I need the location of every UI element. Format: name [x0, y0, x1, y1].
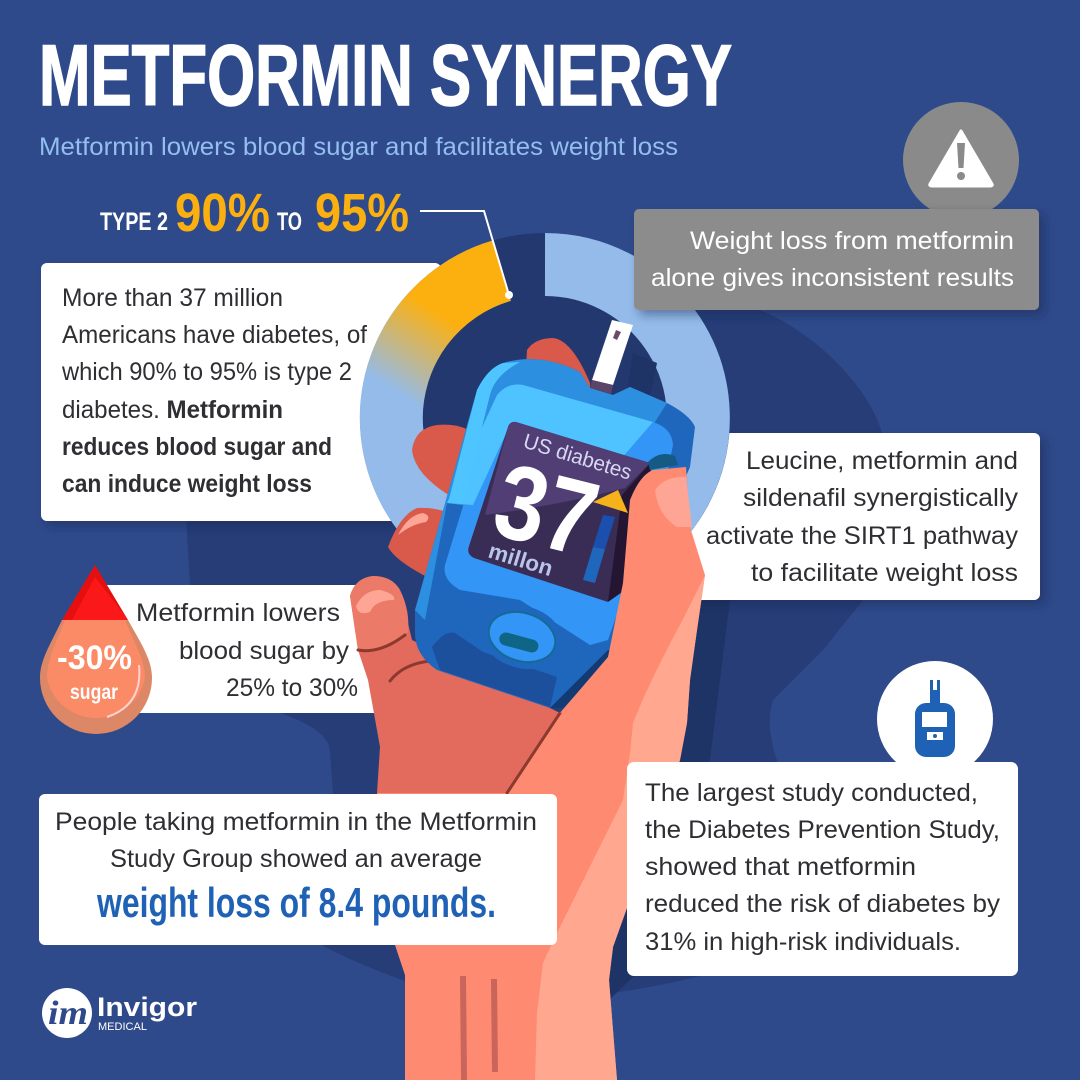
text: diabetes statistics: which 90% to 95% is type 2: [61, 358, 352, 386]
text: blood sugar: 25% to 30%: [226, 674, 358, 702]
meter light edge: [448, 362, 520, 503]
background blob: [185, 290, 882, 1000]
text: blood sugar: [136, 599, 358, 702]
callout: warning: alone gives inconsistent results: [651, 264, 1014, 292]
text: SIRT1 pathway: sildenafil synergistically: [743, 484, 1019, 512]
hand: wrist and lower arm: [377, 575, 705, 1080]
meter side accent: [648, 454, 678, 470]
title: METFORMIN SYNERGY: [39, 28, 732, 124]
panel: blood sugar: [100, 585, 375, 713]
text: blood sugar: blood sugar by: [179, 637, 350, 665]
icon: glucose meter badge: [877, 661, 993, 777]
callout: diabetes prevention study: [627, 762, 1018, 976]
heading: type 2 share: 90%: [175, 183, 270, 243]
callout: weight loss result: Study Group showed an average: [110, 845, 482, 873]
hand: thumb over meter: [560, 467, 705, 713]
screen label: US diabetes: [521, 430, 634, 485]
text: diabetes statistics: reduces blood sugar and: [62, 433, 332, 461]
text: diabetes statistics: [61, 284, 367, 498]
drop label: sugar: [70, 681, 118, 704]
callout: diabetes prevention study: The largest study conducted,: [645, 779, 978, 807]
screen unit: millon: [486, 538, 556, 581]
glucose meter: [415, 320, 695, 708]
hand: creases: [358, 635, 560, 793]
logo: [42, 988, 198, 1038]
text: SIRT1 pathway: Leucine, metformin and: [746, 447, 1018, 475]
hand: palm and thumb: [350, 576, 560, 793]
text: diabetes statistics: Americans have diabetes, of: [62, 321, 367, 349]
callout: diabetes prevention study: the Diabetes Prevention Study,: [645, 816, 1000, 844]
heading: type 2 share: 95%: [315, 183, 409, 243]
callout: weight loss result: [39, 794, 557, 945]
meter screen: [468, 422, 653, 602]
heading: type 2 share: TYPE 2: [100, 208, 168, 236]
drop value: -30%: [57, 639, 132, 677]
meter face: [445, 384, 673, 645]
icon: blood drop: [40, 565, 152, 734]
callout: weight loss result: weight loss of 8.4 pounds.: [96, 879, 496, 926]
logo: Invigor: [97, 992, 198, 1022]
callout: warning: Weight loss from metformin: [690, 227, 1014, 255]
meter highlight: [447, 384, 653, 505]
callout: diabetes prevention study: showed that metformin: [645, 853, 916, 881]
text: diabetes statistics: More than 37 million: [62, 284, 283, 312]
logo: MEDICAL: [98, 1021, 147, 1033]
donut chart: type 2 share: [360, 233, 730, 603]
callout: diabetes prevention study: reduced the risk of diabetes by: [645, 890, 1001, 918]
meter bottom shade: [432, 633, 557, 707]
test strip: [590, 320, 657, 397]
screen arrow: [593, 490, 628, 513]
screen value: 37: [483, 441, 609, 580]
callout: warning: [634, 209, 1039, 310]
meter frame: [415, 359, 667, 620]
hand: back fingers: [388, 338, 590, 576]
wrist tendons: [460, 976, 498, 1080]
meter body: [415, 359, 695, 708]
heading: type 2 share: [100, 183, 409, 243]
meter button: [473, 595, 571, 679]
text: SIRT1 pathway: activate the SIRT1 pathway: [706, 522, 1019, 550]
icon: warning: [903, 102, 1019, 218]
text: SIRT1 pathway: to facilitate weight loss: [751, 559, 1018, 587]
illustration: hand holding glucose meter: [350, 320, 705, 1080]
hand: thumb nail: [356, 590, 394, 613]
text: blood sugar: Metformin lowers: [136, 599, 340, 627]
meter corner shade: [550, 650, 620, 708]
heading: type 2 share: TO: [277, 208, 302, 236]
callout: weight loss result: People taking metformin in the Metformin: [55, 808, 537, 836]
hand: thumbnail: [655, 477, 692, 527]
callout: diabetes prevention study: 31% in high-risk individuals.: [645, 928, 961, 956]
subtitle: Metformin lowers blood sugar and facilitates weight loss: [39, 133, 678, 161]
screen bar: [593, 515, 615, 549]
hand: thumb tip: [350, 576, 408, 650]
logo: im: [48, 995, 88, 1032]
text: SIRT1 pathway: [706, 447, 1019, 587]
panel: SIRT1 pathway: [640, 433, 1040, 600]
hand: peach highlight: [535, 575, 705, 1080]
leader line: [420, 211, 513, 299]
text: diabetes statistics: can induce weight loss: [62, 470, 312, 498]
text: diabetes statistics: diabetes. Metformin: [62, 396, 283, 424]
panel: diabetes statistics: [41, 263, 441, 521]
darker blob behind hand: [560, 590, 730, 1000]
